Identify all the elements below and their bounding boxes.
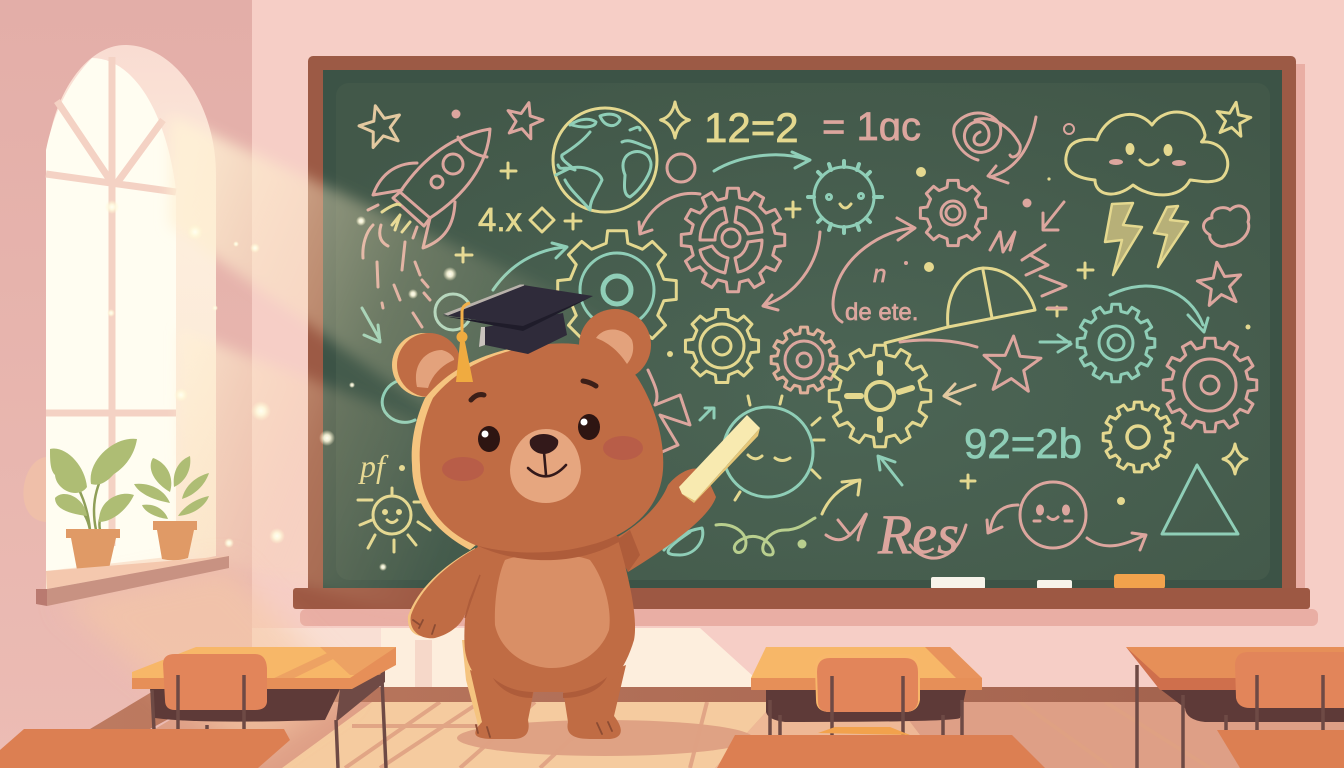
desk edge <box>1126 647 1344 690</box>
chair <box>815 654 920 712</box>
equations top: 4.x <box>478 201 523 238</box>
window sill <box>36 556 229 606</box>
chalk tray <box>293 588 1310 609</box>
scribble text: n <box>873 261 886 288</box>
front left desk <box>0 729 290 768</box>
equations top: 12=2 <box>704 104 799 151</box>
diamond <box>530 208 554 232</box>
stars <box>355 98 1253 474</box>
floor <box>90 702 1344 768</box>
desk legs <box>770 700 962 735</box>
chalk dots <box>399 110 1250 548</box>
tray shadow <box>300 609 1318 626</box>
eyes <box>478 414 600 452</box>
board surface <box>323 70 1282 590</box>
desk top <box>751 647 982 678</box>
desk shelf <box>1160 689 1344 722</box>
gear: large pink <box>681 188 785 292</box>
graduation cap <box>443 285 593 382</box>
scribble text <box>845 232 1066 326</box>
desk edge <box>132 647 396 689</box>
front center desk <box>717 735 1045 768</box>
board shadow <box>1296 64 1305 594</box>
back center desk <box>751 647 982 735</box>
muzzle <box>510 429 581 503</box>
eyebrows <box>471 381 596 400</box>
window recess <box>46 45 216 590</box>
leaves <box>134 456 209 519</box>
head rim <box>412 345 532 550</box>
pink ring <box>667 154 695 182</box>
chalkboard <box>300 56 1318 626</box>
body <box>464 540 635 692</box>
left arm <box>411 547 480 638</box>
small sun left <box>358 488 430 552</box>
chalk doodles <box>355 98 1257 566</box>
cheeks <box>442 436 643 481</box>
scribble text: de ete. <box>845 299 918 326</box>
left ear <box>392 333 461 397</box>
cloud with face <box>1066 112 1228 195</box>
triangle <box>1162 465 1238 534</box>
globe <box>553 108 657 212</box>
window mullions <box>46 57 176 546</box>
baseboard <box>90 687 1344 729</box>
gear: yellow right <box>1103 402 1173 472</box>
pot <box>153 521 197 560</box>
right ear <box>579 309 651 381</box>
sunlight patch on lower wall <box>252 628 765 700</box>
desk top <box>1126 647 1344 682</box>
head <box>420 343 663 552</box>
back left desk <box>132 647 396 768</box>
gear: small pink <box>920 180 986 246</box>
teal swirl <box>664 528 703 555</box>
gear: pink right <box>1163 338 1257 432</box>
bottom squiggle <box>716 518 815 555</box>
paw and toe lines <box>413 620 612 737</box>
gear: yellow spoked <box>829 345 931 447</box>
leg rim <box>462 640 482 730</box>
teal smiling sun <box>808 161 882 233</box>
desk legs <box>1137 665 1226 768</box>
back right desk <box>1126 647 1344 768</box>
desk top <box>132 647 396 680</box>
right arm <box>612 468 716 572</box>
spiral <box>954 113 1020 160</box>
tassel <box>462 303 470 333</box>
chalk pieces on tray <box>931 574 1165 589</box>
Res script: Res <box>877 504 959 566</box>
arrows <box>362 117 1208 550</box>
chair <box>163 654 267 710</box>
glow left of window <box>23 457 46 522</box>
chalk in paw <box>679 415 760 503</box>
plus signs <box>456 163 1093 488</box>
gear: yellow middle <box>685 309 759 383</box>
chair seat <box>818 727 910 735</box>
legs <box>470 665 626 739</box>
semicircle drawing <box>885 268 1035 347</box>
gear: peach middle <box>771 327 837 393</box>
equations top <box>478 104 921 238</box>
stems <box>65 465 120 530</box>
desk shelf <box>766 690 966 722</box>
rocket exhaust yellow <box>382 204 410 232</box>
rocket <box>363 129 490 327</box>
left wall <box>0 0 252 768</box>
gear: teal <box>1077 304 1155 382</box>
belly <box>495 554 610 668</box>
desk shelf <box>150 689 340 722</box>
plant left <box>50 439 137 576</box>
left scribbles: pf <box>358 448 389 484</box>
chair <box>1235 652 1344 708</box>
window <box>46 45 216 590</box>
front right desk <box>1217 730 1344 768</box>
small pink cloud <box>1204 206 1249 246</box>
neck shadow <box>476 530 622 560</box>
gears <box>558 180 1257 472</box>
Res script <box>826 504 966 566</box>
equations top: = 1ɑc <box>822 105 921 149</box>
pot <box>66 529 120 576</box>
sparkles <box>105 200 457 571</box>
leg folds <box>493 677 607 698</box>
plant right <box>134 456 209 560</box>
desk legs <box>152 680 386 768</box>
sun beams <box>60 115 650 760</box>
gear: yellow behind cap <box>558 231 676 349</box>
equation lower: 92=2b <box>964 420 1082 467</box>
desk edge <box>751 678 982 690</box>
left arm rim <box>408 548 478 636</box>
pink smiley <box>1020 482 1086 548</box>
board frame <box>308 56 1296 596</box>
leaves <box>50 439 137 522</box>
bear teacher <box>392 285 760 739</box>
window glass <box>46 58 176 571</box>
nose and mouth <box>528 434 566 476</box>
teal sun behind hand <box>723 396 824 500</box>
lightning bolts <box>1105 203 1188 275</box>
left scribbles <box>358 294 714 484</box>
